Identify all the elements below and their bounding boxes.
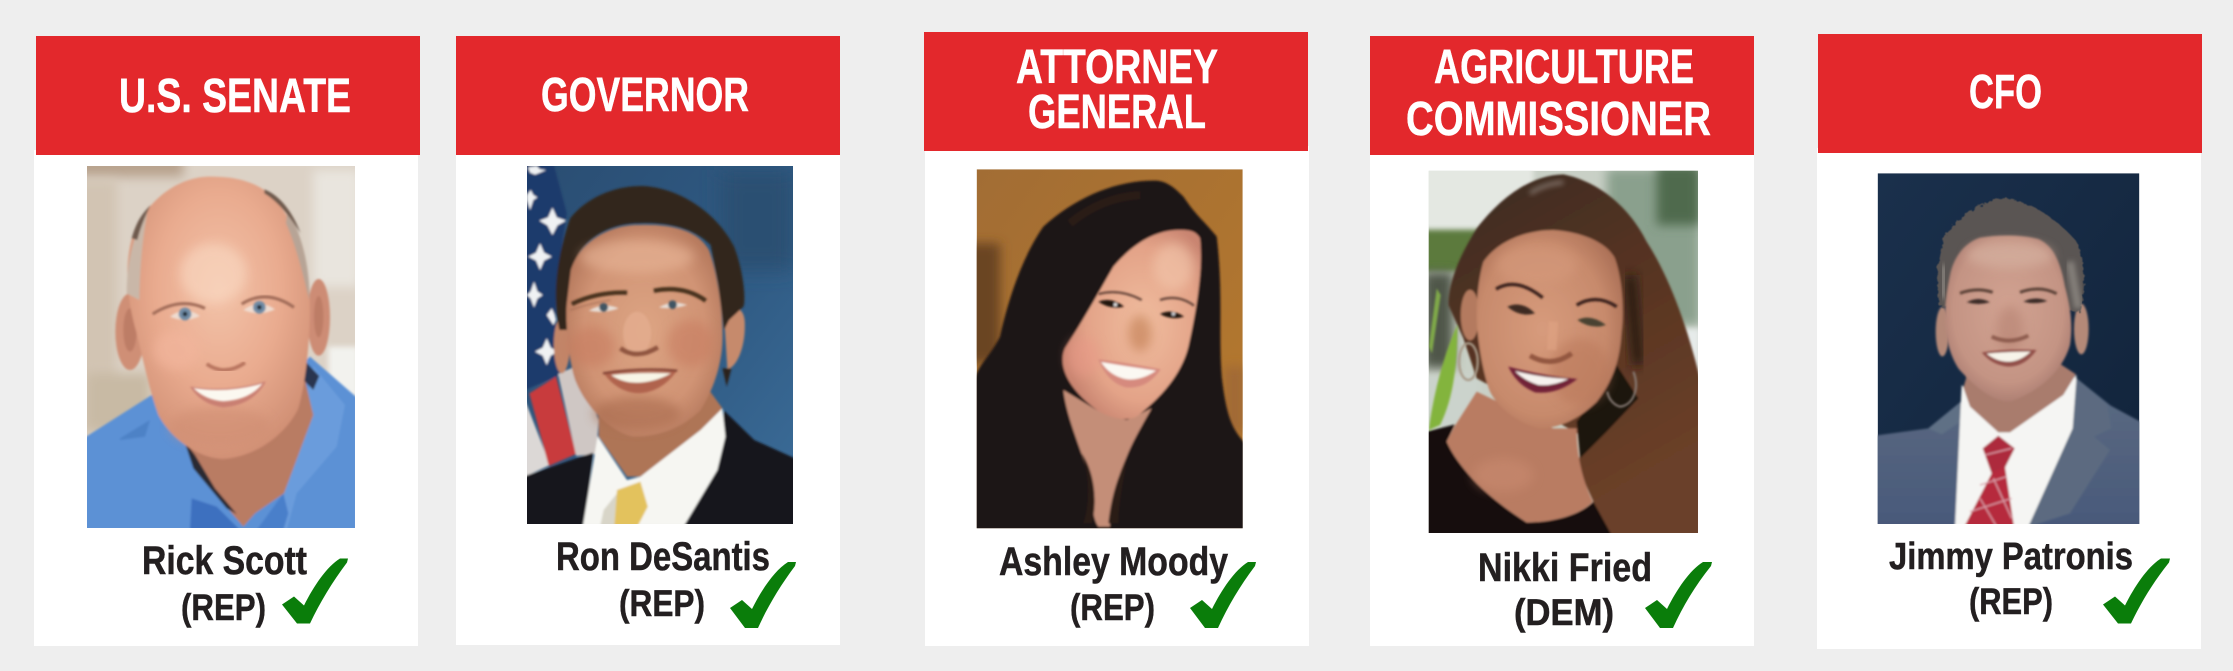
icon: green check mark	[1645, 562, 1712, 628]
black top	[1427, 424, 1612, 535]
head	[127, 177, 310, 459]
eyes	[1967, 299, 1990, 304]
header bar: Governor	[456, 36, 840, 155]
shirt	[1955, 375, 2077, 527]
icon: green check mark	[282, 558, 348, 624]
panel: Agriculture Commissioner	[1370, 36, 1754, 646]
mouth	[1098, 359, 1161, 388]
shirt	[583, 408, 725, 526]
mouth	[604, 371, 677, 393]
stars	[527, 166, 566, 365]
brows	[1960, 290, 1993, 293]
header bar: Agriculture Commissioner	[1370, 36, 1754, 155]
heading: Governor: GOVERNOR	[541, 69, 749, 122]
flag	[525, 163, 567, 390]
photo: Rick Scott	[87, 166, 355, 528]
hair	[1937, 198, 2084, 313]
ears	[554, 317, 570, 373]
hair	[556, 186, 744, 330]
leaves	[1429, 325, 1457, 430]
header bar: U.S. Senate	[36, 36, 420, 155]
brows	[572, 293, 627, 304]
icon: green check mark	[1190, 562, 1256, 628]
party: REP: (REP)	[181, 587, 266, 628]
party: REP: (REP)	[619, 583, 705, 624]
brows	[1098, 292, 1142, 300]
hair	[975, 181, 1245, 530]
face	[1477, 230, 1623, 428]
nose	[623, 312, 651, 355]
ears	[115, 293, 145, 370]
nose	[1530, 353, 1572, 361]
tie	[1983, 436, 2015, 474]
hair	[127, 207, 148, 300]
panel: CFO	[1817, 34, 2202, 649]
name: Nikki Fried: Nikki Fried	[1478, 546, 1652, 590]
face	[1063, 230, 1201, 419]
heading: Attorney General: GENERAL	[1028, 86, 1206, 139]
icon: green check mark	[2103, 558, 2170, 624]
neck	[1447, 392, 1593, 522]
party: REP: (REP)	[1969, 581, 2053, 622]
heading: CFO: CFO	[1969, 66, 2042, 119]
ears	[1936, 307, 1949, 356]
eyes	[170, 311, 200, 320]
nose	[208, 323, 238, 357]
mouth	[190, 381, 266, 407]
name: Ashley Moody: Ashley Moody	[999, 540, 1229, 584]
party: REP: (REP)	[1070, 587, 1155, 628]
name: Rick Scott: Rick Scott	[142, 539, 307, 583]
face	[1945, 236, 2071, 402]
eyes	[1507, 304, 1535, 315]
panel: Attorney General	[924, 32, 1309, 646]
mouth	[1508, 367, 1577, 393]
neck	[599, 360, 722, 477]
heading: Attorney General	[1016, 41, 1218, 139]
nose	[1992, 336, 2028, 341]
face	[566, 225, 723, 437]
header bar: CFO	[1818, 34, 2202, 153]
heading: U.S. Senate: U.S. SENATE	[119, 70, 351, 123]
header bar: Attorney General	[924, 32, 1308, 151]
eyes	[589, 305, 619, 312]
neck	[1963, 362, 2076, 432]
photo: Nikki Fried	[1428, 170, 1698, 533]
suit	[1875, 378, 2142, 527]
panel: Governor	[456, 36, 840, 645]
photo: Jimmy Patronis	[1878, 173, 2140, 524]
shirt	[85, 357, 357, 530]
heading: Agriculture Commissioner: COMMISSIONER	[1406, 93, 1711, 146]
ear	[1461, 290, 1479, 340]
photo: Ron DeSantis	[527, 166, 793, 524]
heading: Agriculture Commissioner	[1406, 41, 1711, 146]
name: Ron DeSantis: Ron DeSantis	[556, 535, 770, 579]
neck	[1063, 390, 1152, 527]
party: DEM: (DEM)	[1514, 592, 1614, 633]
brows	[1496, 284, 1543, 298]
tie	[614, 482, 648, 526]
earrings	[1459, 343, 1478, 380]
panel: U.S. Senate	[34, 36, 420, 646]
name: Jimmy Patronis: Jimmy Patronis	[1889, 536, 2133, 578]
heading: Agriculture Commissioner: AGRICULTURE	[1434, 41, 1694, 94]
photo: Ashley Moody	[976, 169, 1243, 528]
heading: Attorney General: ATTORNEY	[1016, 41, 1218, 94]
icon: green check mark	[730, 562, 796, 628]
suit	[525, 453, 593, 526]
eyes	[1098, 300, 1124, 308]
neck	[155, 380, 313, 527]
mouth	[1982, 349, 2037, 367]
hair	[1448, 174, 1700, 535]
